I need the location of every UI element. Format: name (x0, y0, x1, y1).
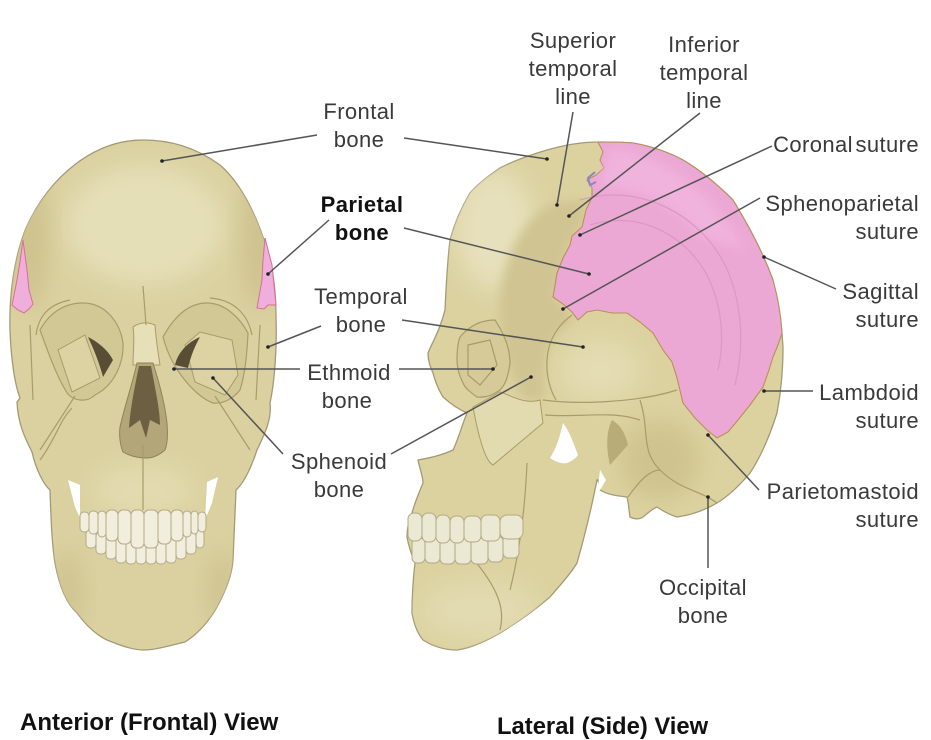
labels: sphenoid bone: bone (314, 477, 364, 502)
nasal dark interior (129, 366, 160, 438)
labels: frontal bone: Frontal (323, 99, 395, 124)
labels: sphenoparietal suture: suture (855, 219, 919, 244)
labels: occipital bone: Occipital (659, 575, 747, 600)
labels: sphenoid bone: Sphenoid (291, 449, 387, 474)
labels: parietomastoid suture: Parietomastoid (767, 479, 919, 504)
parietal pink right (257, 238, 276, 309)
labels: parietal bone: Parietal (321, 192, 403, 217)
cranium, cheeks and mandible (10, 140, 276, 650)
zygomatic arch line (543, 390, 677, 420)
left orbit inner (58, 335, 100, 392)
coronal suture blue detail (588, 172, 596, 185)
labels: sagittal suture: Sagittal (842, 279, 919, 304)
labels: inferior temporal line: temporal (660, 60, 748, 85)
labels: inferior temporal line: line (686, 88, 722, 113)
labels: superior temporal line: Superior (530, 28, 616, 53)
anterior skull illustration (10, 140, 278, 650)
parietal bone pink (553, 142, 782, 438)
pointer dots (160, 157, 766, 499)
right orbit dark fissure (175, 337, 200, 368)
pink highlight (600, 150, 745, 250)
labels: frontal bone: bone (334, 127, 384, 152)
mastoid process (628, 400, 717, 503)
temporal lines on parietal (580, 195, 741, 385)
right orbit (163, 303, 248, 403)
orbit inner sutures (468, 340, 497, 385)
nasal bones (133, 323, 160, 365)
labels: temporal bone: Temporal (314, 284, 408, 309)
soft shading (12, 165, 278, 630)
soft shading (420, 170, 700, 640)
temporal bone border (547, 315, 572, 400)
left orbit dark fissure (88, 337, 113, 377)
jaw ramus line (470, 463, 527, 630)
labels: lambdoid suture: Lambdoid (819, 380, 919, 405)
labels: lambdoid suture: suture (855, 408, 919, 433)
labels: ethmoid bone: Ethmoid (307, 360, 391, 385)
labels: superior temporal line: temporal (529, 56, 617, 81)
upper teeth (80, 512, 89, 532)
parietal pink left (12, 240, 33, 313)
labels: inferior temporal line: Inferior (668, 32, 740, 57)
dark gap behind jaw (607, 420, 628, 465)
right jaw gap (205, 477, 218, 520)
labels: ethmoid bone: bone (322, 388, 372, 413)
labels: coronal suture: Coronal suture (773, 132, 919, 157)
labels: sagittal suture: suture (855, 307, 919, 332)
teeth (80, 510, 206, 564)
lower teeth (86, 530, 96, 548)
labels: superior temporal line: line (555, 84, 591, 109)
labels: occipital bone: bone (678, 603, 728, 628)
labels: sphenoparietal suture: Sphenoparietal (765, 191, 919, 216)
ear opening (550, 423, 578, 463)
right orbit inner (185, 332, 238, 395)
caption: anterior view: Anterior (Frontal) View (20, 709, 279, 736)
leader lines (160, 112, 836, 568)
teeth (408, 513, 523, 564)
labels: parietal bone: bone (335, 220, 389, 245)
skull outline (407, 142, 783, 650)
labels: temporal bone: bone (336, 312, 386, 337)
white sliver (597, 470, 606, 495)
left jaw gap (68, 480, 80, 518)
temple shaded region (500, 200, 587, 400)
left orbit (40, 303, 123, 400)
labels: parietomastoid suture: suture (855, 507, 919, 532)
sutures and brow lines (30, 286, 260, 510)
zygomatic bone (473, 392, 543, 465)
lateral skull illustration (407, 142, 783, 650)
caption: lateral view: Lateral (Side) View (497, 713, 709, 740)
orbit (457, 320, 510, 397)
nasal cavity (120, 363, 167, 458)
